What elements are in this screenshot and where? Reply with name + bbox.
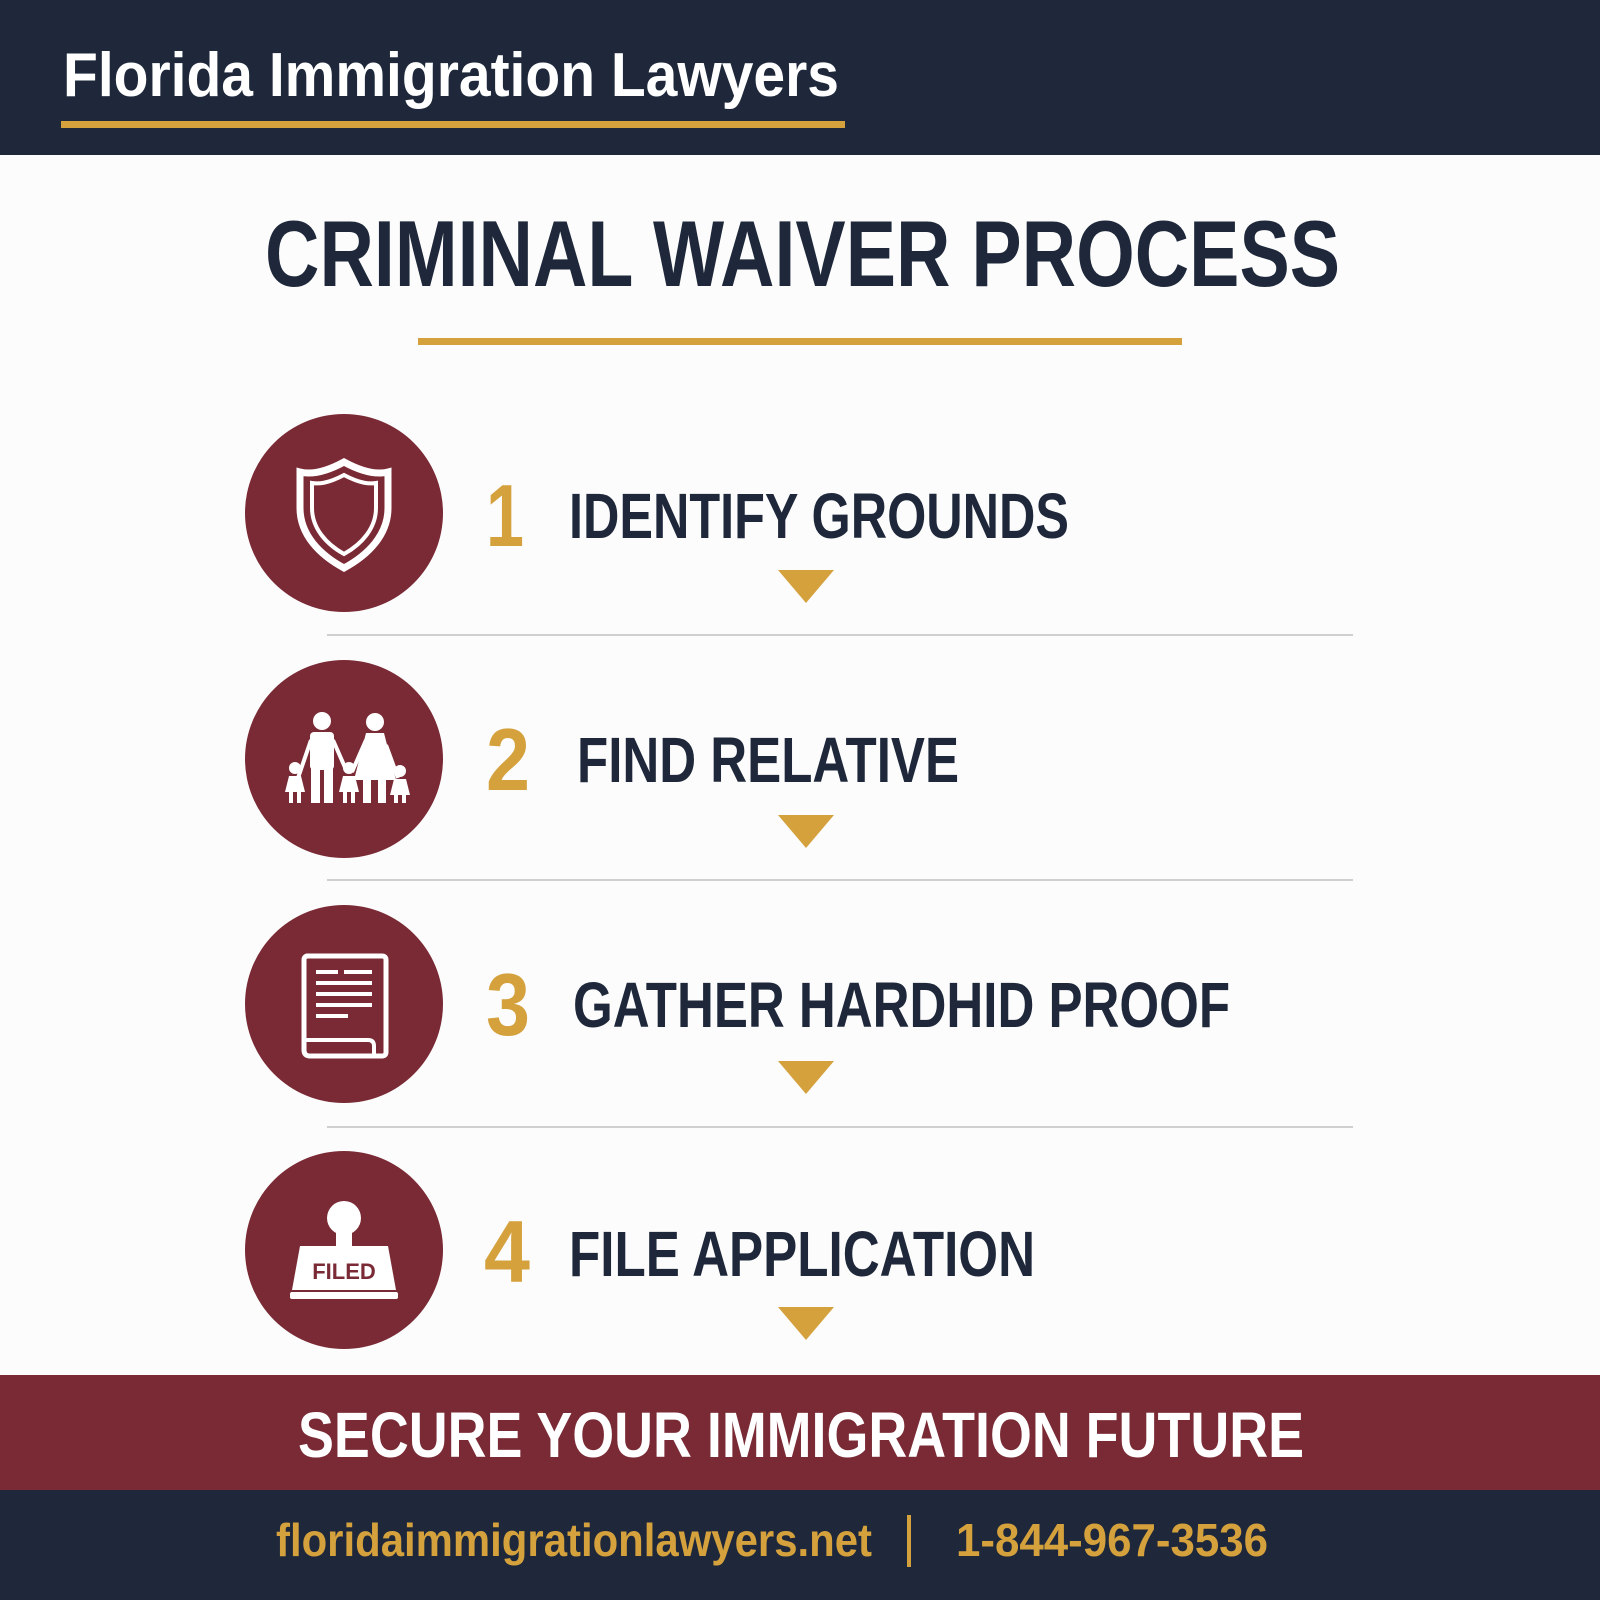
step 3: GATHER HARDHID PROOF [573,969,1230,1041]
step 3 [245,905,1230,1103]
header bar [0,0,1600,155]
step 1 [245,414,1069,612]
icon: filed stamp [245,1151,443,1349]
step 1: IDENTIFY GROUNDS [569,480,1069,552]
arrow [778,570,834,603]
footer: 1-844-967-3536 [956,1514,1268,1566]
step 4: 4 [484,1202,530,1301]
icon: family [245,660,443,858]
step 2 [245,660,959,858]
banner [0,1375,1600,1490]
step 4: FILE APPLICATION [569,1218,1035,1290]
banner: SECURE YOUR IMMIGRATION FUTURE [298,1399,1304,1471]
footer [0,1490,1600,1600]
main title: CRIMINAL WAIVER PROCESS [265,201,1340,306]
icon: filed stamp: FILED [312,1259,376,1284]
icon: shield [245,414,443,612]
step 3: 3 [486,955,530,1054]
footer: floridaimmigrationlawyers.net [276,1514,872,1566]
step 2: FIND RELATIVE [577,724,959,796]
step 1: 1 [486,466,524,565]
step 4 [245,1151,1035,1349]
header title: Florida Immigration Lawyers [63,41,839,110]
step 2: 2 [486,710,530,809]
icon: document [245,905,443,1103]
